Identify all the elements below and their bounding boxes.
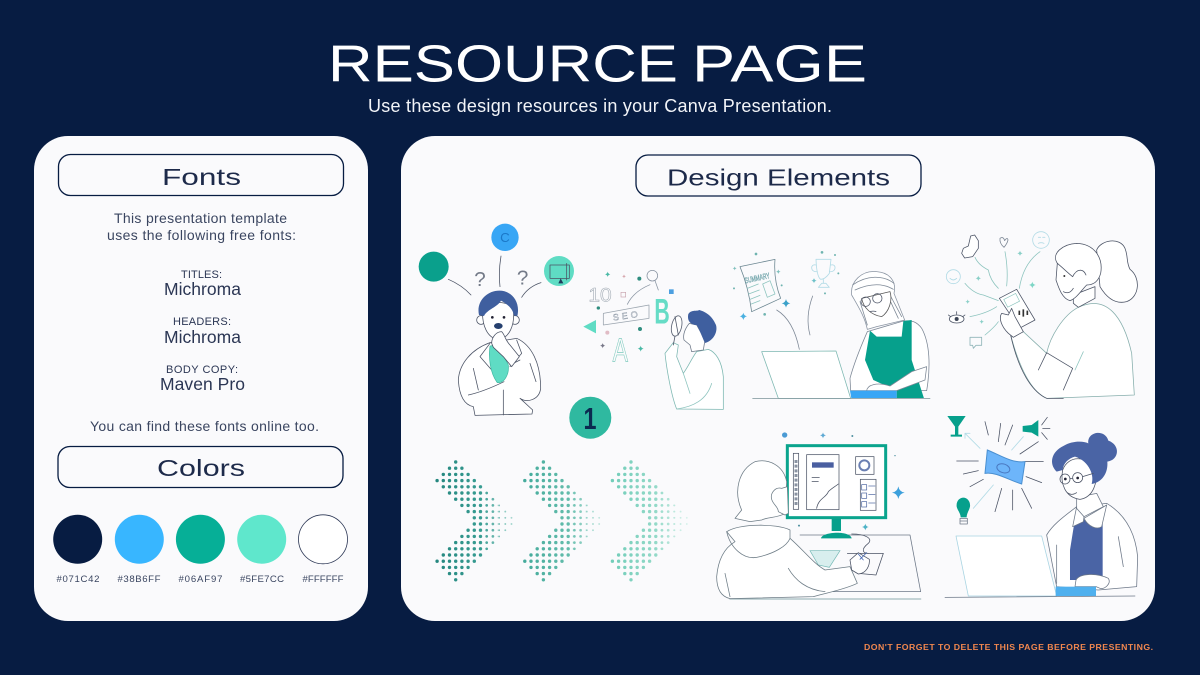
subtitle: Use these design resources in your Canva Presentation. <box>368 96 832 116</box>
footer note: DON'T FORGET TO DELETE THIS PAGE BEFORE PRESENTING. <box>864 642 1153 652</box>
color labels: #38B6FF <box>118 574 161 585</box>
text block: font list: BODY COPY: <box>166 364 238 376</box>
color labels: #071C42 <box>56 574 100 585</box>
heading: colors: Colors <box>157 455 245 481</box>
text block: font list: HEADERS: <box>173 316 231 328</box>
color swatches <box>53 515 347 564</box>
text block: font intro: uses the following free fonts: <box>107 227 296 243</box>
text block: fonts note: You can find these fonts online too. <box>90 418 319 434</box>
illustration: thinking man: C <box>500 230 510 245</box>
illustration: SEO search: A <box>613 332 629 369</box>
text block: font list: Michroma <box>164 327 241 347</box>
badge: number one: 1 <box>584 401 596 436</box>
color labels: #FFFFFF <box>302 574 344 585</box>
illustration: SEO search: 10 <box>588 285 612 306</box>
panel: fonts and colors <box>34 136 368 621</box>
title: PAGE <box>692 36 867 94</box>
chevron arrows: halftone dots <box>437 462 687 580</box>
illustration: thinking man: ? <box>474 268 486 291</box>
color labels <box>56 574 344 585</box>
illustration: woman at laptop with summary <box>733 251 930 398</box>
text block: font list: Maven Pro <box>160 374 245 394</box>
text block: font list: TITLES: <box>181 269 222 281</box>
heading: fonts: Fonts <box>162 164 241 190</box>
heading: fonts <box>58 154 344 196</box>
panel: design elements <box>401 136 1155 621</box>
badge: number one <box>569 397 611 439</box>
text block: font list: Michroma <box>164 279 241 299</box>
color labels: #06AF97 <box>178 574 222 585</box>
illustration: woman at laptop with ticket <box>945 416 1138 597</box>
text block: font list <box>160 269 245 394</box>
text block: font intro: This presentation template <box>114 210 287 226</box>
heading: colors <box>58 446 343 488</box>
illustration: thinking man <box>419 224 574 415</box>
illustration: woman with phone and social icons <box>946 232 1137 398</box>
illustration: thinking man: ? <box>517 267 528 290</box>
heading: design elements: Design Elements <box>667 164 890 190</box>
illustration: SEO search: B <box>654 292 670 331</box>
color labels: #5FE7CC <box>240 574 284 585</box>
illustration: SEO search <box>583 270 723 409</box>
illustration: woman at laptop with summary: SUMMARY <box>744 271 771 285</box>
illustration: SEO search: SEO <box>612 309 638 323</box>
title: RESOURCE <box>328 36 678 94</box>
title <box>328 36 867 94</box>
illustration: designer at monitor <box>717 432 921 599</box>
heading: design elements <box>636 155 921 196</box>
text block: font intro <box>107 210 296 243</box>
